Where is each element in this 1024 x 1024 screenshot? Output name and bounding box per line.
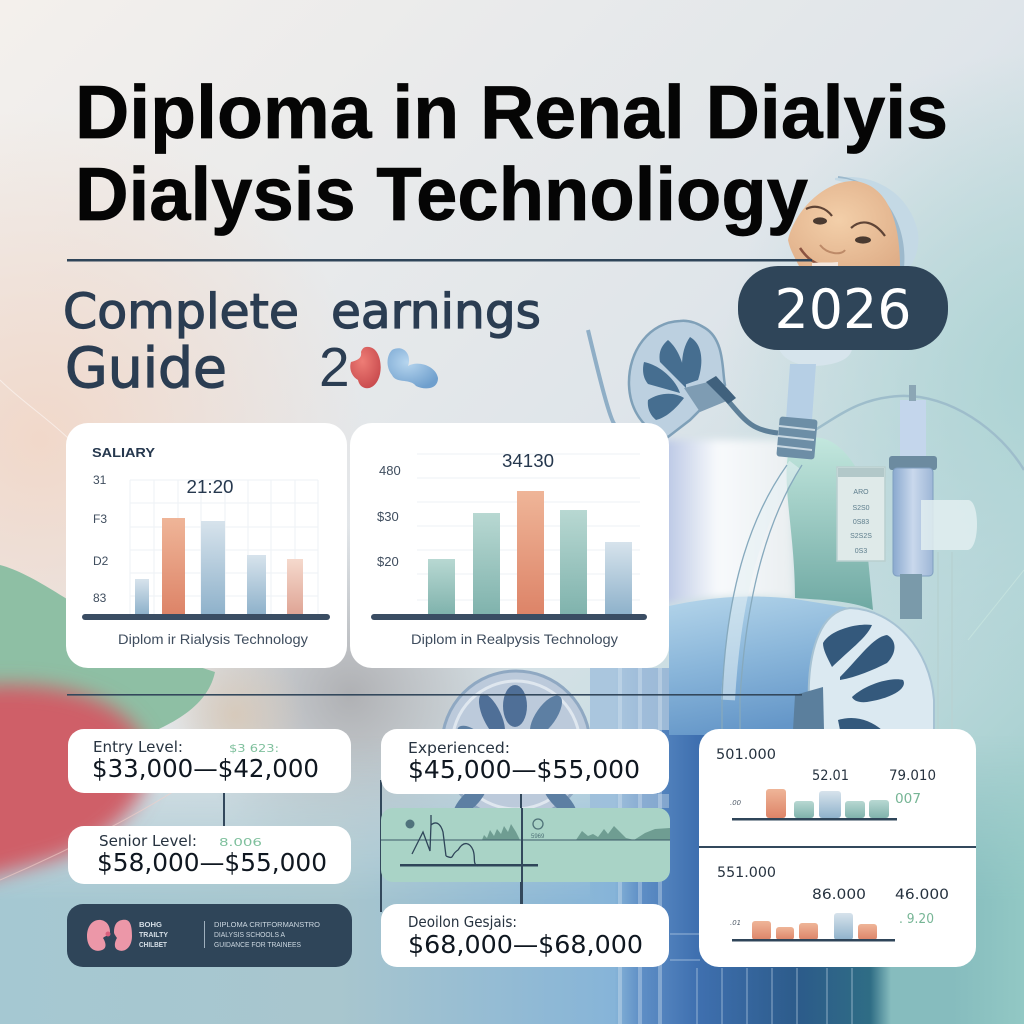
vertical stripes and grid xyxy=(620,668,660,1024)
bars xyxy=(135,518,303,614)
connector lines xyxy=(224,780,521,912)
upper mini chart: 79.010 xyxy=(889,768,936,784)
white torso xyxy=(655,440,795,606)
panel: senior level salary: 8.006 xyxy=(219,836,262,849)
upper filter fan xyxy=(629,321,736,437)
upper mini chart: 007 xyxy=(895,792,921,807)
axis labels: D2 xyxy=(93,554,109,568)
lower mini chart: 86.000 xyxy=(812,887,866,903)
lower blue panel xyxy=(590,668,892,1024)
upper connector tube xyxy=(815,396,1024,470)
panel: footer with kidney icon: DIALYSIS SCHOOLS A xyxy=(214,932,285,939)
title xyxy=(75,70,948,236)
chart caption: Diplom ir Rialysis Technology xyxy=(118,632,308,647)
bars xyxy=(428,491,632,614)
panel: entry level salary: $3 623: xyxy=(229,742,279,755)
panel: experienced salary xyxy=(381,729,669,794)
axis labels xyxy=(377,463,401,569)
clear tubes xyxy=(728,465,795,700)
nurse face xyxy=(788,176,905,266)
panel: mini bar charts xyxy=(699,729,976,967)
label tag: S2S0 xyxy=(852,505,870,512)
panel: senior level salary: Senior Level: xyxy=(99,832,197,850)
axis labels: 480 xyxy=(379,463,401,478)
upper mini chart: .00 xyxy=(730,799,742,807)
medical illustration: dialysis equipment xyxy=(442,321,1024,1024)
panel: footer with kidney icon: CHILBET xyxy=(139,940,167,949)
panel: footer with kidney icon: GUIDANCE FOR TRAINEES xyxy=(214,942,301,949)
panel: footer with kidney icon xyxy=(67,904,352,967)
label tag: ARO xyxy=(853,489,869,496)
title: Diploma in Renal Dialyis xyxy=(75,70,948,154)
panel: waveform band xyxy=(381,808,670,905)
lower mini chart: 46.000 xyxy=(895,887,949,903)
upper mini chart xyxy=(716,747,936,820)
title rule xyxy=(67,259,812,262)
panel: footer with kidney icon: BOHG xyxy=(139,920,162,929)
chart heading: SALIARY xyxy=(92,445,155,460)
chart value: 34130 xyxy=(502,451,554,471)
axis labels: F3 xyxy=(93,512,107,526)
lower mini chart: . 9.20 xyxy=(899,912,934,927)
panel: experienced salary: $45,000—$55,000 xyxy=(408,755,640,784)
label tag: S2S2S xyxy=(850,533,872,540)
icon: kidneys xyxy=(350,347,438,388)
label tag xyxy=(837,467,885,561)
axis labels: $20 xyxy=(377,554,399,569)
panel: footer with kidney icon: DIPLOMA CRITFORMANSTRO xyxy=(214,922,321,929)
lower mini chart: .01 xyxy=(730,919,741,927)
axis labels xyxy=(93,473,109,605)
panel: technology chart xyxy=(350,423,669,668)
label tag: 0S3 xyxy=(855,548,867,555)
axis labels: 31 xyxy=(93,473,107,487)
axis labels: $30 xyxy=(377,509,399,524)
label tag: 0S83 xyxy=(853,519,869,526)
panel: footer with kidney icon: TRAILTY xyxy=(139,930,168,939)
axis labels: 83 xyxy=(93,591,107,605)
center filter behind cards xyxy=(442,671,590,821)
panel: salary chart xyxy=(66,423,347,668)
upper mini chart: 52.01 xyxy=(812,768,849,784)
subtitle xyxy=(63,284,541,400)
subtitle: Guide xyxy=(65,336,227,400)
subtitle: 2 xyxy=(319,336,350,398)
blue upper body xyxy=(669,597,892,735)
panel: senior level salary: $58,000—$55,000 xyxy=(97,848,327,877)
panel: senior level salary xyxy=(68,826,351,884)
panel: waveform band: 5969 xyxy=(531,834,545,840)
subtitle: earnings xyxy=(331,284,541,340)
panel: decision goals salary xyxy=(381,904,669,967)
teal gown xyxy=(787,437,873,610)
panel: experienced salary: Experienced: xyxy=(408,739,510,757)
panel: decision goals salary: $68,000—$68,000 xyxy=(408,930,643,959)
lower mini chart: 551.000 xyxy=(717,865,776,881)
year badge xyxy=(738,266,948,350)
upper mini chart: 501.000 xyxy=(716,747,776,763)
drip chamber xyxy=(889,385,977,730)
chart value: 21:20 xyxy=(186,477,234,497)
panel: entry level salary: Entry Level: xyxy=(93,738,183,756)
chart caption: Diplom in Realpysis Technology xyxy=(411,632,618,647)
year badge: 2026 xyxy=(774,278,912,341)
subtitle: Complete xyxy=(63,284,299,340)
section rule xyxy=(67,694,802,696)
panel: entry level salary xyxy=(68,729,351,793)
vertical connector xyxy=(778,345,852,366)
panel: decision goals salary: Deoilon Gesjais: xyxy=(408,913,517,931)
lower filter fan xyxy=(793,608,934,730)
panel: entry level salary: $33,000—$42,000 xyxy=(92,754,319,783)
title: Dialysis Technoliogy xyxy=(75,152,808,236)
icon: pink kidneys xyxy=(87,920,132,951)
lower mini chart xyxy=(717,865,949,942)
